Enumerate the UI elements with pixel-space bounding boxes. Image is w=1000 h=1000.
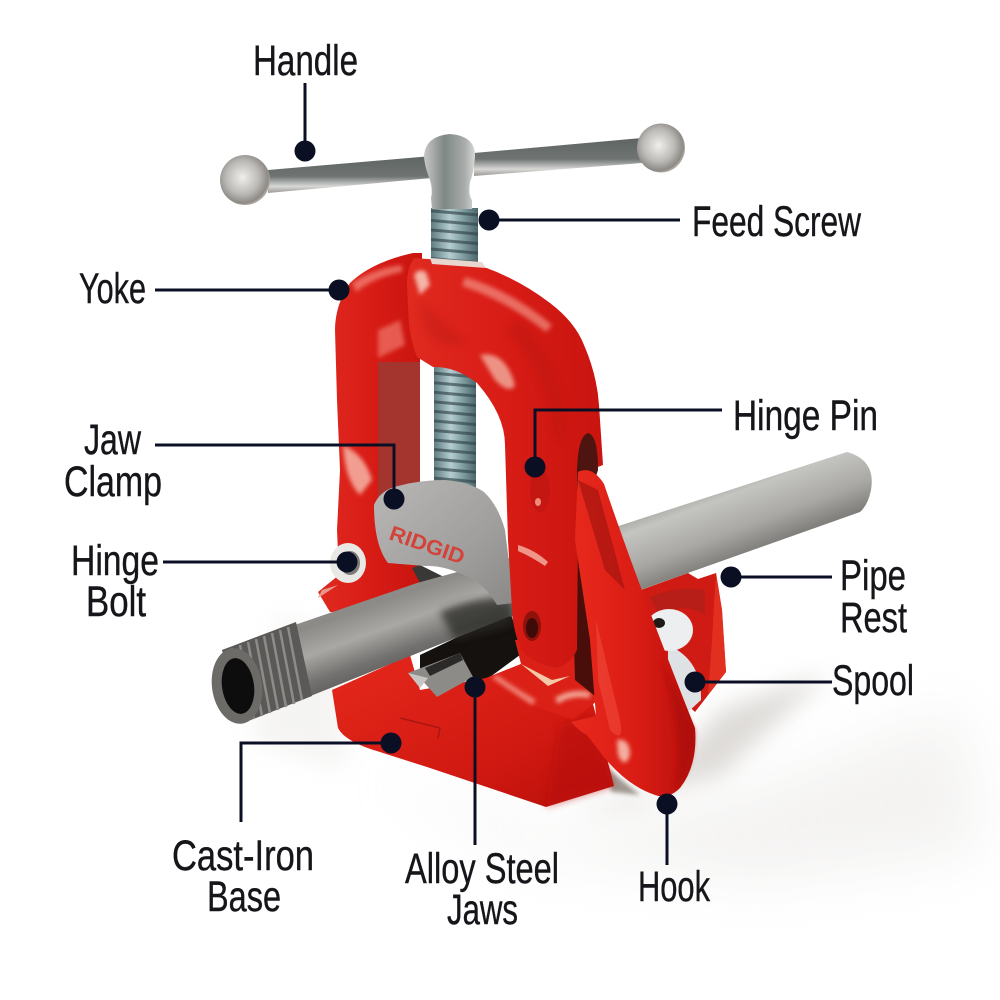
handle knob right: [637, 124, 685, 172]
label: Hook: Hook: [638, 863, 710, 911]
label: Alloy Steel Jaws: Jaws: [447, 886, 518, 934]
RIDGID logo: RIDGID: [386, 522, 468, 569]
upper feed screw thread: [431, 208, 478, 264]
handle knob left: [220, 155, 270, 205]
label: Hinge Bolt: [71, 537, 358, 626]
jaw clamp: [374, 480, 514, 605]
pipe rest: [635, 573, 726, 712]
label: Hinge Bolt: Hinge: [71, 537, 159, 585]
dark gap between arm and hook: [570, 500, 600, 700]
pipe: [207, 452, 872, 727]
label: Hinge Pin: [524, 392, 878, 478]
label: Hinge Bolt: Bolt: [86, 578, 146, 626]
label: Yoke: [79, 265, 350, 313]
label: Cast-Iron Base: [172, 732, 402, 921]
label: Jaw Clamp: [64, 416, 404, 510]
handle bar: [268, 138, 642, 193]
upper jaw teeth: [412, 565, 470, 612]
label: Spool: [684, 657, 914, 705]
label: Pipe Rest: [720, 552, 907, 642]
label: Alloy Steel Jaws: [405, 676, 559, 934]
hook: [571, 470, 695, 796]
label: Pipe Rest: Pipe: [840, 552, 906, 600]
label: Feed Screw: [478, 198, 862, 246]
label: Jaw Clamp: Jaw: [84, 416, 142, 464]
label: Jaw Clamp: Clamp: [64, 458, 162, 506]
label: Spool: Spool: [832, 657, 914, 705]
pipe threads: [222, 622, 312, 723]
shadow under the vise: [250, 615, 980, 880]
label: Hinge Pin: Hinge Pin: [733, 392, 878, 440]
yoke rear arm: [318, 253, 434, 612]
label: Handle: [253, 37, 358, 162]
label: Alloy Steel Jaws: Alloy Steel: [405, 845, 559, 893]
label: Feed Screw: Feed Screw: [692, 198, 862, 246]
label: Pipe Rest: Rest: [840, 594, 907, 642]
label: Hook: [638, 794, 710, 911]
cast-iron base: [332, 640, 614, 807]
label: Cast-Iron Base: Base: [207, 873, 281, 921]
shadow gap beneath pipe: [420, 612, 524, 682]
label: Yoke: Yoke: [79, 265, 146, 313]
yoke front arch: [407, 258, 603, 668]
label: Handle: Handle: [253, 37, 358, 85]
alloy steel jaws: [408, 653, 473, 697]
handle centre head: [424, 134, 475, 209]
lower feed screw thread: [434, 355, 476, 492]
spool: [645, 609, 701, 712]
pipe mouth: [207, 645, 267, 727]
vise illustration: [207, 124, 872, 807]
label: Cast-Iron Base: Cast-Iron: [172, 832, 314, 880]
